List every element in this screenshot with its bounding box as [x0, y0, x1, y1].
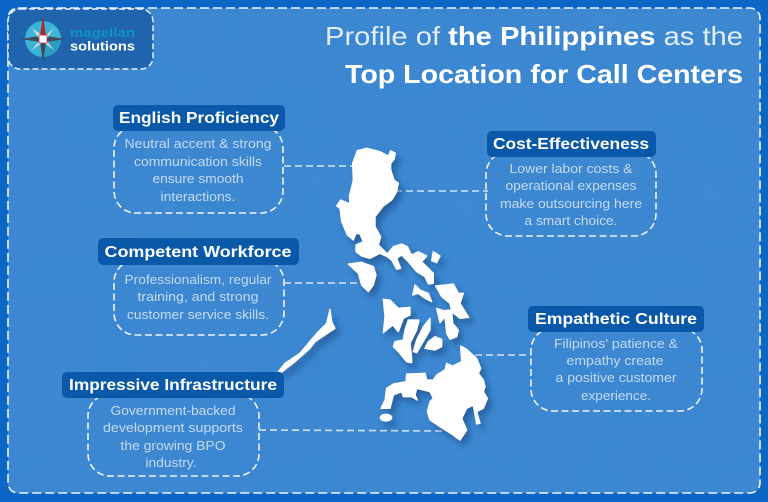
description [103, 403, 244, 470]
description: Filipinos' patience & [554, 336, 678, 351]
panel: Cost-Effectiveness [486, 131, 656, 236]
body outline [88, 394, 259, 476]
panel: English Proficiency [113, 105, 285, 213]
description: Lower labor costs & [510, 161, 633, 176]
title line 2: Top Location for Call Centers [345, 59, 743, 89]
description [500, 161, 642, 228]
description: Government-backed [110, 403, 236, 418]
description: operational expenses [506, 178, 637, 193]
description: a smart choice. [524, 213, 618, 228]
heading: English Proficiency [119, 110, 279, 127]
panel: Competent Workforce [98, 238, 299, 335]
icon: compass [20, 17, 66, 63]
description: experience. [581, 388, 651, 403]
logo wordmark: magellan [70, 25, 135, 40]
logo wordmark [70, 25, 135, 54]
description: interactions. [160, 189, 236, 204]
description: Neutral accent & strong [124, 136, 272, 151]
description [124, 136, 272, 204]
body outline [114, 126, 283, 213]
description: empathy create [566, 353, 664, 368]
description: training, and strong [138, 289, 258, 304]
heading [113, 105, 285, 131]
description [554, 336, 678, 403]
description [124, 272, 272, 322]
body outline [114, 260, 284, 335]
description: make outsourcing here [500, 196, 642, 211]
logo panel [8, 9, 153, 69]
heading [528, 306, 704, 332]
heading: Impressive Infrastructure [69, 377, 277, 394]
heading [487, 131, 656, 157]
description: Professionalism, regular [124, 272, 272, 287]
heading [98, 238, 299, 265]
Visayas [383, 284, 469, 363]
description: communication skills [134, 154, 263, 169]
Luzon [337, 148, 440, 292]
connector lines [259, 166, 531, 431]
Mindanao [380, 346, 487, 440]
title line 1: Profile of the Philippines as the [325, 21, 743, 51]
description: a positive customer [556, 370, 677, 385]
description: customer service skills. [127, 307, 269, 322]
Palawan [278, 309, 335, 373]
body outline [531, 328, 702, 411]
heading: Empathetic Culture [535, 311, 697, 328]
logo wordmark: solutions [70, 38, 135, 54]
panel: Empathetic Culture [528, 306, 704, 411]
description: ensure smooth [152, 171, 244, 186]
panel: Impressive Infrastructure [62, 372, 284, 476]
description: industry. [146, 455, 196, 470]
heading: Cost-Effectiveness [493, 136, 649, 153]
map of the Philippines [278, 148, 487, 440]
heading [62, 372, 284, 398]
body outline [486, 152, 656, 236]
description: the growing BPO [120, 438, 226, 453]
title [325, 21, 743, 89]
description: development supports [103, 420, 244, 435]
heading: Competent Workforce [104, 244, 292, 261]
